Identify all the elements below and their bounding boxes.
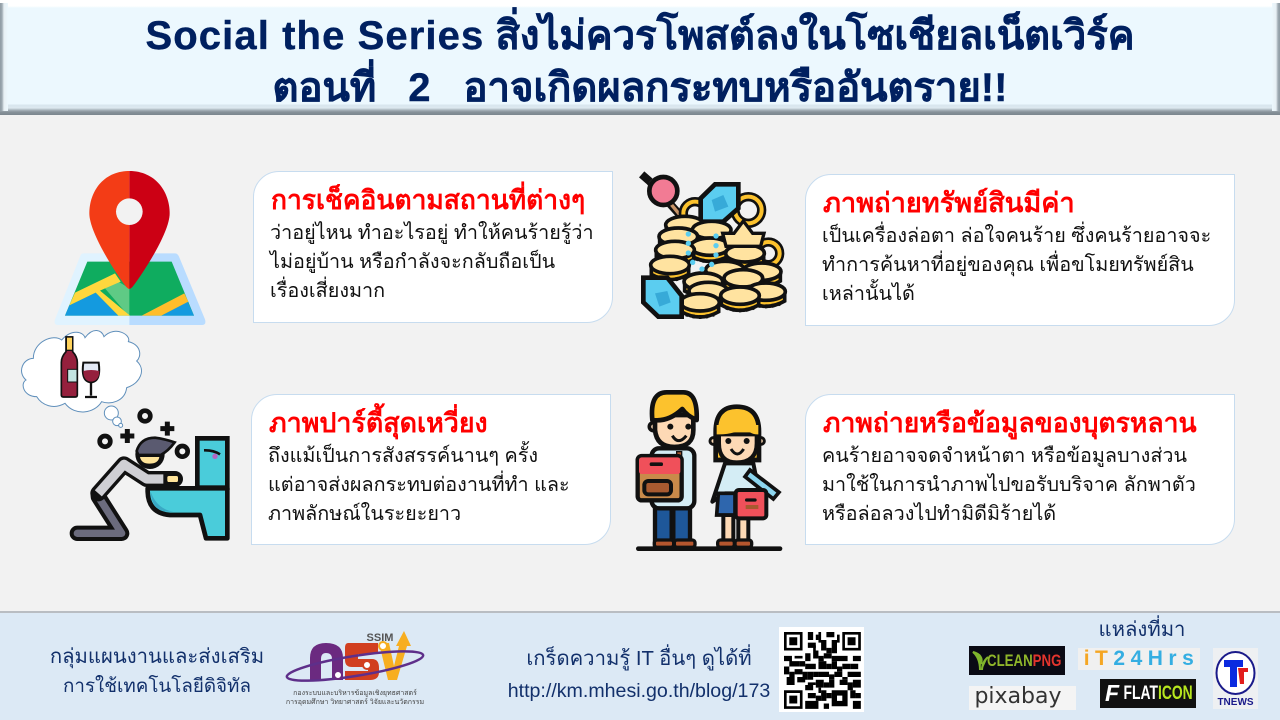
panel: valuables [805, 174, 1235, 326]
logo: Flaticon: FLATICON [1124, 683, 1193, 704]
body text: children [822, 445, 1196, 525]
title line 1: Social the Series สิ่งไม่ควรโพสต์ลงในโซเชียลเน็ตเวิร์ค [145, 14, 1135, 58]
footer: department name: การใช้เทคโนโลยีดิจิทัล [63, 675, 251, 696]
icon: two children [636, 390, 782, 551]
icon: drunk person with thought cloud [21, 330, 230, 541]
QR code [779, 627, 864, 712]
body text: party: แต่อาจส่งผลกระทบต่องานที่ทำ และ [268, 474, 570, 496]
logo: TNews: TNEWS [1217, 697, 1254, 708]
body text: valuables [822, 222, 1211, 305]
icon: coins and gems [639, 171, 788, 319]
body text: party [268, 441, 570, 525]
body text: check-in: ไม่อยู่บ้าน หรือกำลังจะกลับถือเป็น [270, 251, 555, 273]
logo: SSIM: การอุดมศึกษา วิทยาศาสตร์ วิจัยและนวัตกรรม [286, 697, 424, 706]
footer: knowledge link: เกร็ดความรู้ IT อื่นๆ ดูได้ที่ [526, 648, 752, 670]
body text: children: มาใช้ในการนำภาพไปขอรับบริจาค ลักพาตัว [822, 474, 1196, 496]
logo: iT24Hrs: iT24Hrs [1084, 647, 1199, 670]
footer: knowledge link [508, 644, 770, 702]
logo: Flaticon [1100, 679, 1196, 708]
body text: valuables: เป็นเครื่องล่อตา ล่อใจคนร้าย ซึ่งคนร้ายอาจจะ [822, 225, 1211, 247]
panel: party [251, 394, 611, 545]
footer bar [0, 611, 1280, 720]
panel: children [805, 394, 1235, 545]
body text: valuables: เหล่านั้นได้ [822, 283, 915, 305]
icon: map pin [54, 171, 206, 325]
title line 2: ตอนที่ 2 อาจเกิดผลกระทบหรืออันตราย!! [273, 66, 1007, 110]
logo: Flaticon: F [1105, 680, 1119, 706]
body text: check-in [268, 221, 594, 302]
footer: department name [50, 646, 264, 696]
heading: valuables: ภาพถ่ายทรัพย์สินมีค่า [823, 187, 1075, 218]
logo: SSIM [286, 631, 424, 706]
footer: department name: กลุ่มแผนงานและส่งเสริม [50, 646, 264, 668]
body text: valuables: ทำการค้นหาที่อยู่ของคุณ เพื่อขโมยทรัพย์สิน [822, 254, 1194, 276]
header banner [0, 0, 1280, 115]
sources heading: แหล่งที่มา [1099, 619, 1185, 641]
logo: CleanPNG [969, 646, 1065, 675]
heading: children: ภาพถ่ายหรือข้อมูลของบุตรหลาน [823, 408, 1197, 438]
body text: children: คนร้ายอาจจดจำหน้าตา หรือข้อมูลบางส่วน [822, 445, 1187, 467]
heading: check-in: การเช็คอินตามสถานที่ต่างๆ [271, 185, 585, 215]
logo: Pixabay: pixabay [974, 684, 1062, 709]
heading: party: ภาพปาร์ตี้สุดเหวี่ยง [269, 408, 488, 438]
body text: check-in: ว่าอยู่ไหน ทำอะไรอยู่ ทำให้คนร้ายรู้ว่า [270, 222, 594, 244]
body text: party: ถึงแม้เป็นการสังสรรค์นานๆ ครั้ง [268, 445, 538, 467]
body text: party: ภาพลักษณ์ในระยะยาว [268, 503, 461, 525]
footer: knowledge link: http://km.mhesi.go.th/blog/173 [508, 680, 770, 702]
body text: check-in: เรื่องเสี่ยงมาก [270, 280, 385, 302]
panel: check-in [253, 171, 613, 323]
body text: children: หรือล่อลวงไปทำมิดีมิร้ายได้ [822, 503, 1056, 525]
icon: thought cloud [22, 331, 141, 427]
logo: CleanPNG: CLEANPNG [987, 651, 1061, 670]
logo: SSIM: กองระบบและบริหารข้อมูลเชิงยุทธศาสตร์ [293, 689, 417, 697]
logo: SSIM: SSIM [367, 632, 393, 644]
logo: TNews [1213, 648, 1258, 709]
